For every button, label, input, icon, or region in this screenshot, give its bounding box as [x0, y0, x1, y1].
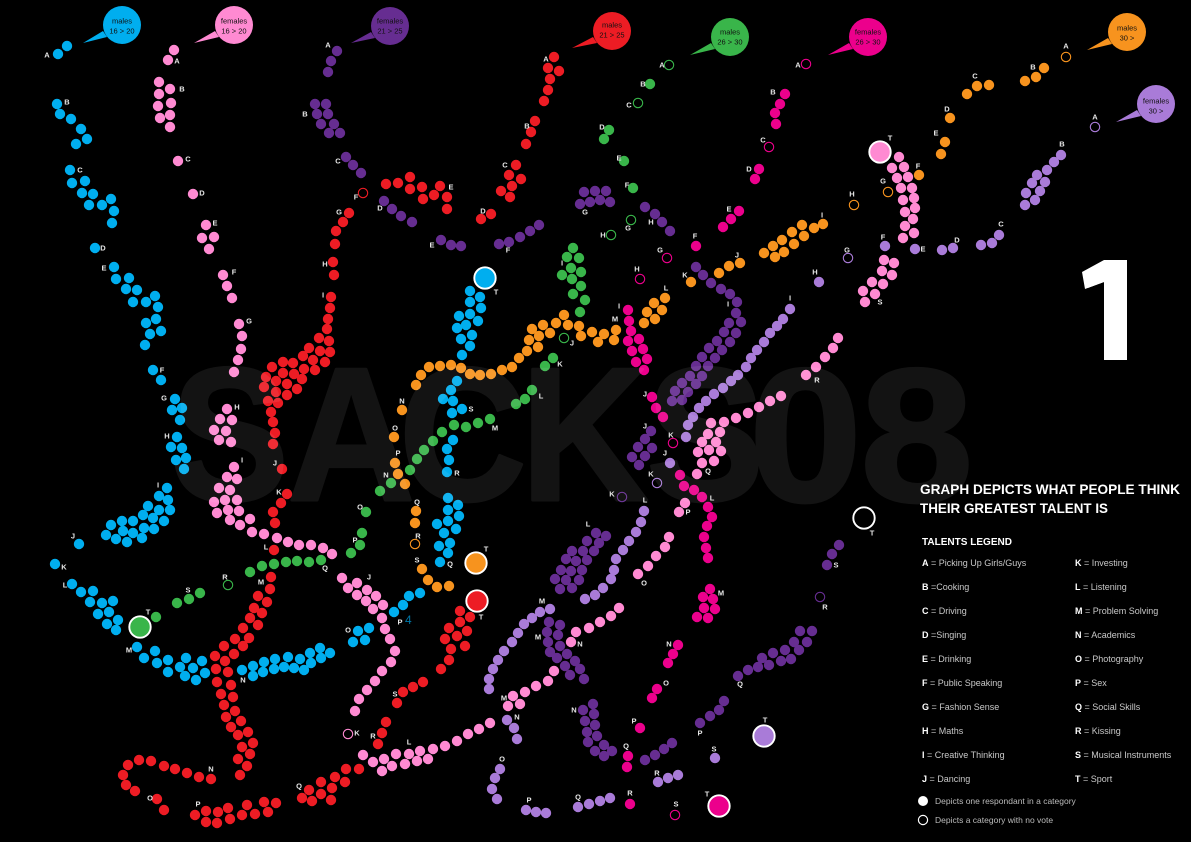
talent letters: green: N: [383, 470, 389, 480]
speech bubble: males 26 > 30: 26 > 30: [717, 38, 743, 46]
talent letters: blue: P: [397, 618, 403, 626]
talent letters: light purple: [499, 112, 1098, 804]
talent letters: red: D: [480, 206, 486, 216]
legend column: A to J: J = Dancing: [922, 774, 970, 784]
watermark: SACKS08: SACKS: [171, 328, 764, 540]
talent letters: magenta: R: [627, 788, 633, 798]
talent letters: red: F: [354, 192, 359, 202]
talent letters: light purple: L: [643, 496, 648, 504]
talent letters: red: E: [448, 182, 454, 192]
sport marker: red: [466, 590, 488, 612]
talent letters: green: K: [557, 360, 563, 368]
talent letters: magenta: [618, 60, 801, 808]
legend column: K to T: R = Kissing: [1075, 726, 1121, 736]
talent letters: magenta: H: [634, 264, 640, 274]
talent letters: dark purple: G: [582, 208, 588, 216]
talent letters: orange: E: [933, 128, 939, 138]
key: filled dot: Depicts one respondant in a category: [935, 796, 1077, 806]
number annotation: 4: 4: [405, 613, 412, 627]
talent letters: magenta: D: [746, 164, 752, 174]
talent letters: blue: E: [101, 264, 107, 272]
talent letters: red: H: [322, 260, 328, 268]
legend column: K to T: N = Academics: [1075, 630, 1136, 640]
legend column: A to J: E = Drinking: [922, 654, 971, 664]
talent letters: magenta: N: [666, 640, 672, 648]
talent letters: magenta: C: [760, 136, 766, 144]
talent letters: pink: B: [179, 84, 185, 94]
legend title: TALENTS LEGEND: [922, 536, 1012, 548]
talent letters: orange: N: [399, 396, 405, 406]
light purple dots: [489, 155, 1061, 813]
talent letters: red: C: [502, 160, 508, 170]
no-vote markers: magenta: [635, 59, 811, 820]
talent letters: light purple: N: [514, 712, 520, 722]
talent letters: blue: R: [454, 468, 460, 478]
no-vote markers: dark purple: [617, 492, 825, 602]
talent letters: light purple: S: [711, 744, 717, 754]
talent letters: magenta: O: [663, 678, 669, 688]
speech bubble: females 30 >: 30 >: [1149, 106, 1164, 116]
talent letters: dark purple: C: [335, 156, 341, 166]
legend column: K to T: T = Sport: [1075, 774, 1113, 784]
no-vote markers: green: [223, 60, 674, 590]
sport marker: light purple: [753, 725, 775, 747]
heading: graph description: THEIR GREATEST TALENT IS: [920, 500, 1108, 516]
talent letters: red: A: [543, 54, 549, 64]
speech bubble: females 30 >: [1116, 85, 1175, 123]
green dots: [156, 84, 650, 617]
legend column: K to T: M = Problem Solving: [1075, 606, 1158, 616]
talent letters: dark purple: S: [833, 560, 839, 570]
sport marker: green: [129, 616, 151, 638]
dark purple dots: [315, 51, 839, 760]
talent letters: blue: F: [160, 366, 165, 374]
speech bubble: females 30 >: females: [1143, 96, 1169, 106]
talent letters: dark purple: P: [697, 728, 703, 738]
talent letters: orange: P: [395, 448, 401, 458]
talent letters: green: O: [357, 502, 363, 512]
legend column: A to J: G = Fashion Sense: [922, 702, 999, 712]
no-vote marker: red F: [358, 188, 368, 198]
speech bubble: males 30 >: males: [1117, 24, 1137, 32]
series: males 21-25 (red): [123, 12, 631, 823]
talent letters: magenta: T: [705, 790, 710, 798]
talent letters: pink: O: [641, 578, 647, 588]
talent letters: green: L: [539, 392, 544, 400]
sport marker: pink: [869, 141, 891, 163]
speech bubble: females 26 > 30: 26 > 30: [855, 38, 881, 46]
legend column: K to T: O = Photography: [1075, 654, 1144, 664]
legend column: K to T: P = Sex: [1075, 678, 1107, 688]
talent letters: red: B: [524, 122, 530, 130]
talent letters: blue: A: [44, 50, 50, 60]
talent letters: light purple: H: [812, 268, 818, 276]
talent letters: blue: O: [345, 626, 351, 634]
speech bubble: females 16 > 20: females: [221, 16, 247, 26]
legend column: K to T: K = Investing: [1075, 558, 1128, 568]
series: females 30+ (light purple): [489, 85, 1175, 813]
talent letters: orange: M: [612, 314, 618, 324]
talent letters: red: T: [479, 612, 484, 622]
talent letters: orange: S: [414, 556, 420, 564]
talent letters: red: G: [336, 208, 342, 216]
talent letters: orange: G: [880, 176, 886, 186]
talent letters: red: M: [258, 578, 264, 586]
talent letters: pink: I: [241, 456, 243, 464]
heading: graph description: [920, 481, 1180, 516]
talent letters: green: M: [492, 424, 498, 432]
series: males 30+ (orange): [392, 13, 1146, 587]
talent letters: pink: J: [367, 572, 371, 582]
talent letters: green: F: [625, 180, 630, 190]
talent letters: light purple: B: [1059, 140, 1065, 148]
speech bubble: males 21 > 25: 21 > 25: [599, 30, 625, 40]
talent letters: green: R: [222, 572, 228, 582]
talent letters: pink: Q: [705, 466, 711, 476]
talent letters: red: I: [322, 290, 324, 300]
talent letters: dark purple: M: [535, 632, 541, 642]
talent letters: light purple: J: [663, 448, 667, 458]
talent letters: blue: J: [71, 532, 75, 540]
talent letters: pink: F: [232, 268, 237, 276]
blue dots: [55, 46, 481, 680]
talent letters: pink: G: [246, 316, 252, 326]
legend column: K to T: [1075, 558, 1172, 784]
series: males 16-20 (blue): [44, 6, 499, 684]
talent letters: blue: [44, 50, 499, 684]
talent letters: pink: H: [234, 402, 240, 412]
talent letters: green: [146, 60, 665, 616]
legend column: A to J: I = Creative Thinking: [922, 750, 1005, 760]
talent letters: pink: T: [888, 134, 893, 142]
talent letters: dark purple: L: [586, 520, 591, 528]
talent letters: magenta: L: [710, 494, 715, 502]
talent letters: red: P: [195, 800, 201, 808]
no-vote markers: orange: [410, 52, 1071, 549]
talent letters: light purple: Q: [575, 792, 581, 802]
talent letters: pink: P: [685, 508, 691, 516]
talent letters: dark purple: I: [727, 300, 729, 308]
talent letters: orange: K: [682, 270, 688, 280]
series: females 16-20 (pink): [158, 6, 915, 771]
talent letters: light purple: F: [881, 232, 886, 242]
talent letters: pink: S: [877, 298, 883, 306]
talent letters: orange: R: [415, 532, 421, 540]
talent letters: magenta: P: [631, 716, 637, 726]
talent letters: green: I: [561, 258, 563, 268]
no-vote marker: pink K: [343, 729, 353, 739]
talent letters: orange: H: [849, 190, 855, 198]
talent letters: magenta: K: [668, 430, 674, 440]
talent letters: dark purple: T: [870, 528, 875, 538]
talent letters: green: S: [185, 586, 191, 594]
talent letters: red: L: [264, 542, 269, 552]
talent letters: light purple: G: [844, 246, 850, 254]
series: males 26-30 (green): [129, 18, 749, 638]
talent letters: magenta: F: [693, 232, 698, 240]
talent letters: pink: [174, 56, 893, 746]
sport marker: orange: [465, 552, 487, 574]
talent letters: green: H: [600, 230, 606, 240]
legend column: A to J: D =Singing: [922, 630, 966, 640]
legend column: A to J: [922, 558, 1027, 784]
talent letters: blue: C: [77, 166, 83, 174]
talent letters: red: O: [147, 794, 153, 802]
talent letters: dark purple: J: [643, 422, 647, 430]
talent letters: dark purple: N: [571, 706, 577, 714]
talent letters: orange: F: [916, 162, 921, 170]
legend column: K to T: S = Musical Instruments: [1075, 750, 1172, 760]
talent letters: dark purple: Q: [737, 680, 743, 688]
talent letters: magenta: J: [643, 390, 647, 398]
talent letters: magenta: I: [618, 302, 620, 310]
talent letters: pink: A: [174, 56, 180, 66]
talent letters: pink: D: [199, 188, 205, 198]
talent letters: red: [147, 54, 549, 808]
talent letters: blue: Q: [447, 560, 453, 568]
speech bubble: females 26 > 30: [828, 18, 887, 56]
talent letters: magenta: G: [657, 246, 663, 254]
talent letters: magenta: S: [673, 800, 679, 808]
speech bubble: females 21 > 25: 21 > 25: [377, 26, 403, 36]
speech bubble: males 16 > 20: [83, 6, 141, 44]
talent letters: pink: C: [185, 154, 191, 164]
pink dots: [158, 50, 915, 771]
legend column: K to T: L = Listening: [1075, 582, 1127, 592]
series: females 26-30 (magenta): [618, 18, 887, 820]
talent letters: pink: R: [814, 376, 820, 384]
talent letters: blue: S: [468, 404, 474, 414]
speech bubble: males 26 > 30: [690, 18, 749, 56]
speech bubble: males 21 > 25: [572, 12, 631, 50]
talent letters: green: C: [626, 100, 632, 110]
talent letters: light purple: K: [648, 470, 654, 478]
talent letters: blue: M: [126, 646, 132, 654]
talent letters: orange: I: [821, 210, 823, 220]
talent letters: green: A: [659, 60, 665, 70]
watermark: SACKS08: 08: [749, 329, 973, 542]
talent letters: orange: [392, 42, 1069, 564]
talent letters: dark purple: K: [609, 490, 615, 498]
talent letters: dark purple: H: [648, 218, 654, 226]
talent letters: orange: Q: [414, 498, 420, 506]
talent letters: green: D: [599, 122, 605, 132]
talent letters: orange: L: [664, 284, 669, 292]
talent letters: green: G: [625, 224, 631, 232]
speech bubble: males 26 > 30: males: [720, 28, 740, 36]
speech bubble: males 30 >: [1087, 13, 1146, 51]
heading: graph description: GRAPH DEPICTS WHAT PEOPLE THINK: [920, 481, 1180, 497]
talent letters: magenta: M: [718, 588, 724, 598]
talent letters: red: J: [273, 458, 277, 468]
talent letters: dark purple: F: [506, 246, 511, 254]
talent letters: dark purple: E: [429, 240, 435, 250]
speech bubble: females 16 > 20: [194, 6, 253, 44]
talent letters: pink: N: [577, 640, 583, 648]
talent letters: orange: A: [1063, 42, 1069, 50]
talent letters: dark purple: R: [822, 602, 828, 612]
talent letters: blue: B: [64, 98, 70, 106]
legend column: A to J: F = Public Speaking: [922, 678, 1002, 688]
talent letters: light purple: D: [954, 236, 960, 244]
talent letters: blue: N: [240, 676, 246, 684]
speech bubble: females 21 > 25: [351, 7, 409, 45]
talent letters: light purple: A: [1092, 112, 1098, 122]
legend column: A to J: C = Driving: [922, 606, 967, 616]
talent letters: magenta: A: [795, 60, 801, 70]
speech bubble: males 21 > 25: males: [602, 20, 622, 30]
talent letters: orange: D: [944, 104, 950, 114]
talent letters: light purple: O: [499, 754, 505, 764]
series: females 21-25 (dark purple): [302, 7, 875, 760]
talent letters: pink: K: [354, 728, 360, 738]
talent letters: green: T: [146, 608, 151, 616]
talent letters: light purple: M: [539, 596, 545, 606]
talent letters: light purple: P: [526, 796, 532, 804]
speech bubble: males 30 >: 30 >: [1120, 34, 1135, 42]
sport marker: empty: [853, 507, 875, 529]
talent letters: blue: I: [157, 480, 159, 490]
speech bubble: females 21 > 25: females: [377, 16, 403, 26]
talent letters: orange: J: [735, 250, 739, 260]
legend column: A to J: A = Picking Up Girls/Guys: [922, 558, 1027, 568]
talent letters: green: J: [570, 338, 574, 348]
talents legend: [918, 536, 1172, 825]
talent letters: dark purple: A: [325, 40, 331, 50]
talent letters: pink: E: [212, 218, 218, 228]
magenta dots: [627, 94, 785, 804]
talent letters: red: S: [392, 690, 398, 698]
speech bubble: males 16 > 20: 16 > 20: [109, 26, 135, 36]
talent letters: green: E: [616, 154, 622, 162]
orange dots: [394, 68, 1044, 587]
key: hollow dot: Depicts a category with no vote: [935, 815, 1053, 825]
talent letters: magenta: Q: [623, 742, 629, 750]
legend column: A to J: H = Maths: [922, 726, 964, 736]
talent letters: light purple: C: [998, 220, 1004, 228]
speech bubble: males 16 > 20: males: [112, 16, 132, 26]
talent letters: orange: B: [1030, 62, 1036, 72]
talent letters: pink: L: [407, 738, 412, 746]
legend column: A to J: B =Cooking: [922, 582, 969, 592]
page number: 1: 1: [1078, 231, 1156, 388]
talent letters: blue: H: [164, 432, 170, 440]
talent letters: dark purple: [302, 40, 875, 738]
talent letters: red: R: [370, 732, 376, 740]
talent letters: blue: K: [61, 562, 67, 572]
talent letters: green: B: [640, 80, 646, 88]
talent letters: light purple: E: [920, 244, 926, 254]
talent letters: magenta: B: [770, 88, 776, 96]
talent letters: orange: C: [972, 72, 978, 80]
talent letters: blue: D: [100, 244, 106, 252]
speech bubble: females 26 > 30: females: [855, 28, 881, 36]
talent letters: magenta: E: [726, 204, 732, 214]
talent letters: dark purple: B: [302, 110, 308, 118]
talent letters: light purple: I: [789, 294, 791, 302]
talent letters: red: Q: [296, 782, 302, 790]
sport marker: magenta: [708, 795, 730, 817]
talent letters: light purple: R: [654, 768, 660, 778]
talent letters: orange: T: [484, 544, 489, 554]
talent letters: light purple: T: [763, 716, 768, 724]
talent letters: red: N: [208, 764, 214, 774]
talent letters: blue: L: [63, 580, 68, 590]
red dots: [123, 57, 559, 823]
talent letters: dark purple: D: [377, 204, 383, 212]
talent letters: green: P: [352, 536, 358, 544]
sport marker: blue: [474, 267, 496, 289]
talent letters: blue: G: [161, 394, 167, 402]
no-vote markers: light purple: [652, 122, 1100, 488]
talent letters: blue: T: [494, 288, 499, 296]
talent letters: pink: M: [501, 694, 507, 702]
talent letters: red: K: [276, 488, 282, 496]
talent letters: orange: O: [392, 424, 398, 432]
legend column: K to T: Q = Social Skills: [1075, 702, 1141, 712]
talent letters: green: Q: [322, 564, 328, 572]
speech bubble: females 16 > 20: 16 > 20: [221, 26, 247, 36]
